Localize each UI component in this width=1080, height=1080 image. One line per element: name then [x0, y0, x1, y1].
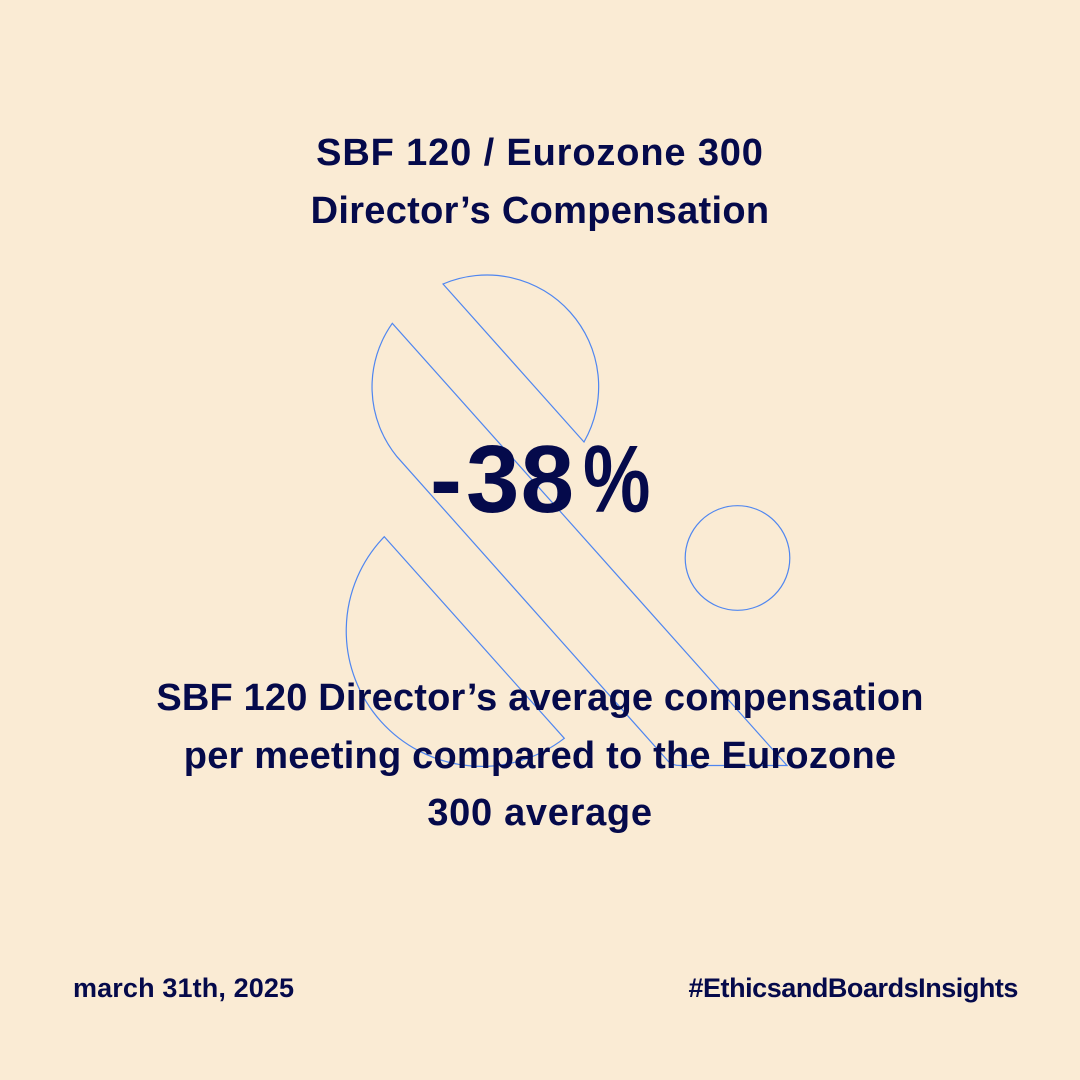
description: per meeting compared to the Eurozone: [184, 735, 896, 777]
description: SBF 120 Director’s average compensation: [156, 677, 924, 719]
title: SBF 120 / Eurozone 300: [316, 132, 764, 174]
top half-circle shape: [443, 275, 599, 442]
key figure: %: [583, 426, 650, 533]
description: [156, 677, 924, 834]
title: [311, 132, 769, 232]
description: 300 average: [427, 792, 653, 834]
hashtag: #EthicsandBoardsInsights: [688, 973, 1018, 1003]
key figure: -: [430, 426, 462, 533]
circle shape: [685, 506, 790, 610]
title: Director’s Compensation: [311, 190, 769, 232]
long diagonal bar shape: [372, 323, 787, 766]
key figure: [430, 426, 650, 533]
key figure: 38: [466, 426, 575, 533]
lower half-circle shape: [346, 537, 564, 766]
date: march 31th, 2025: [73, 973, 294, 1003]
